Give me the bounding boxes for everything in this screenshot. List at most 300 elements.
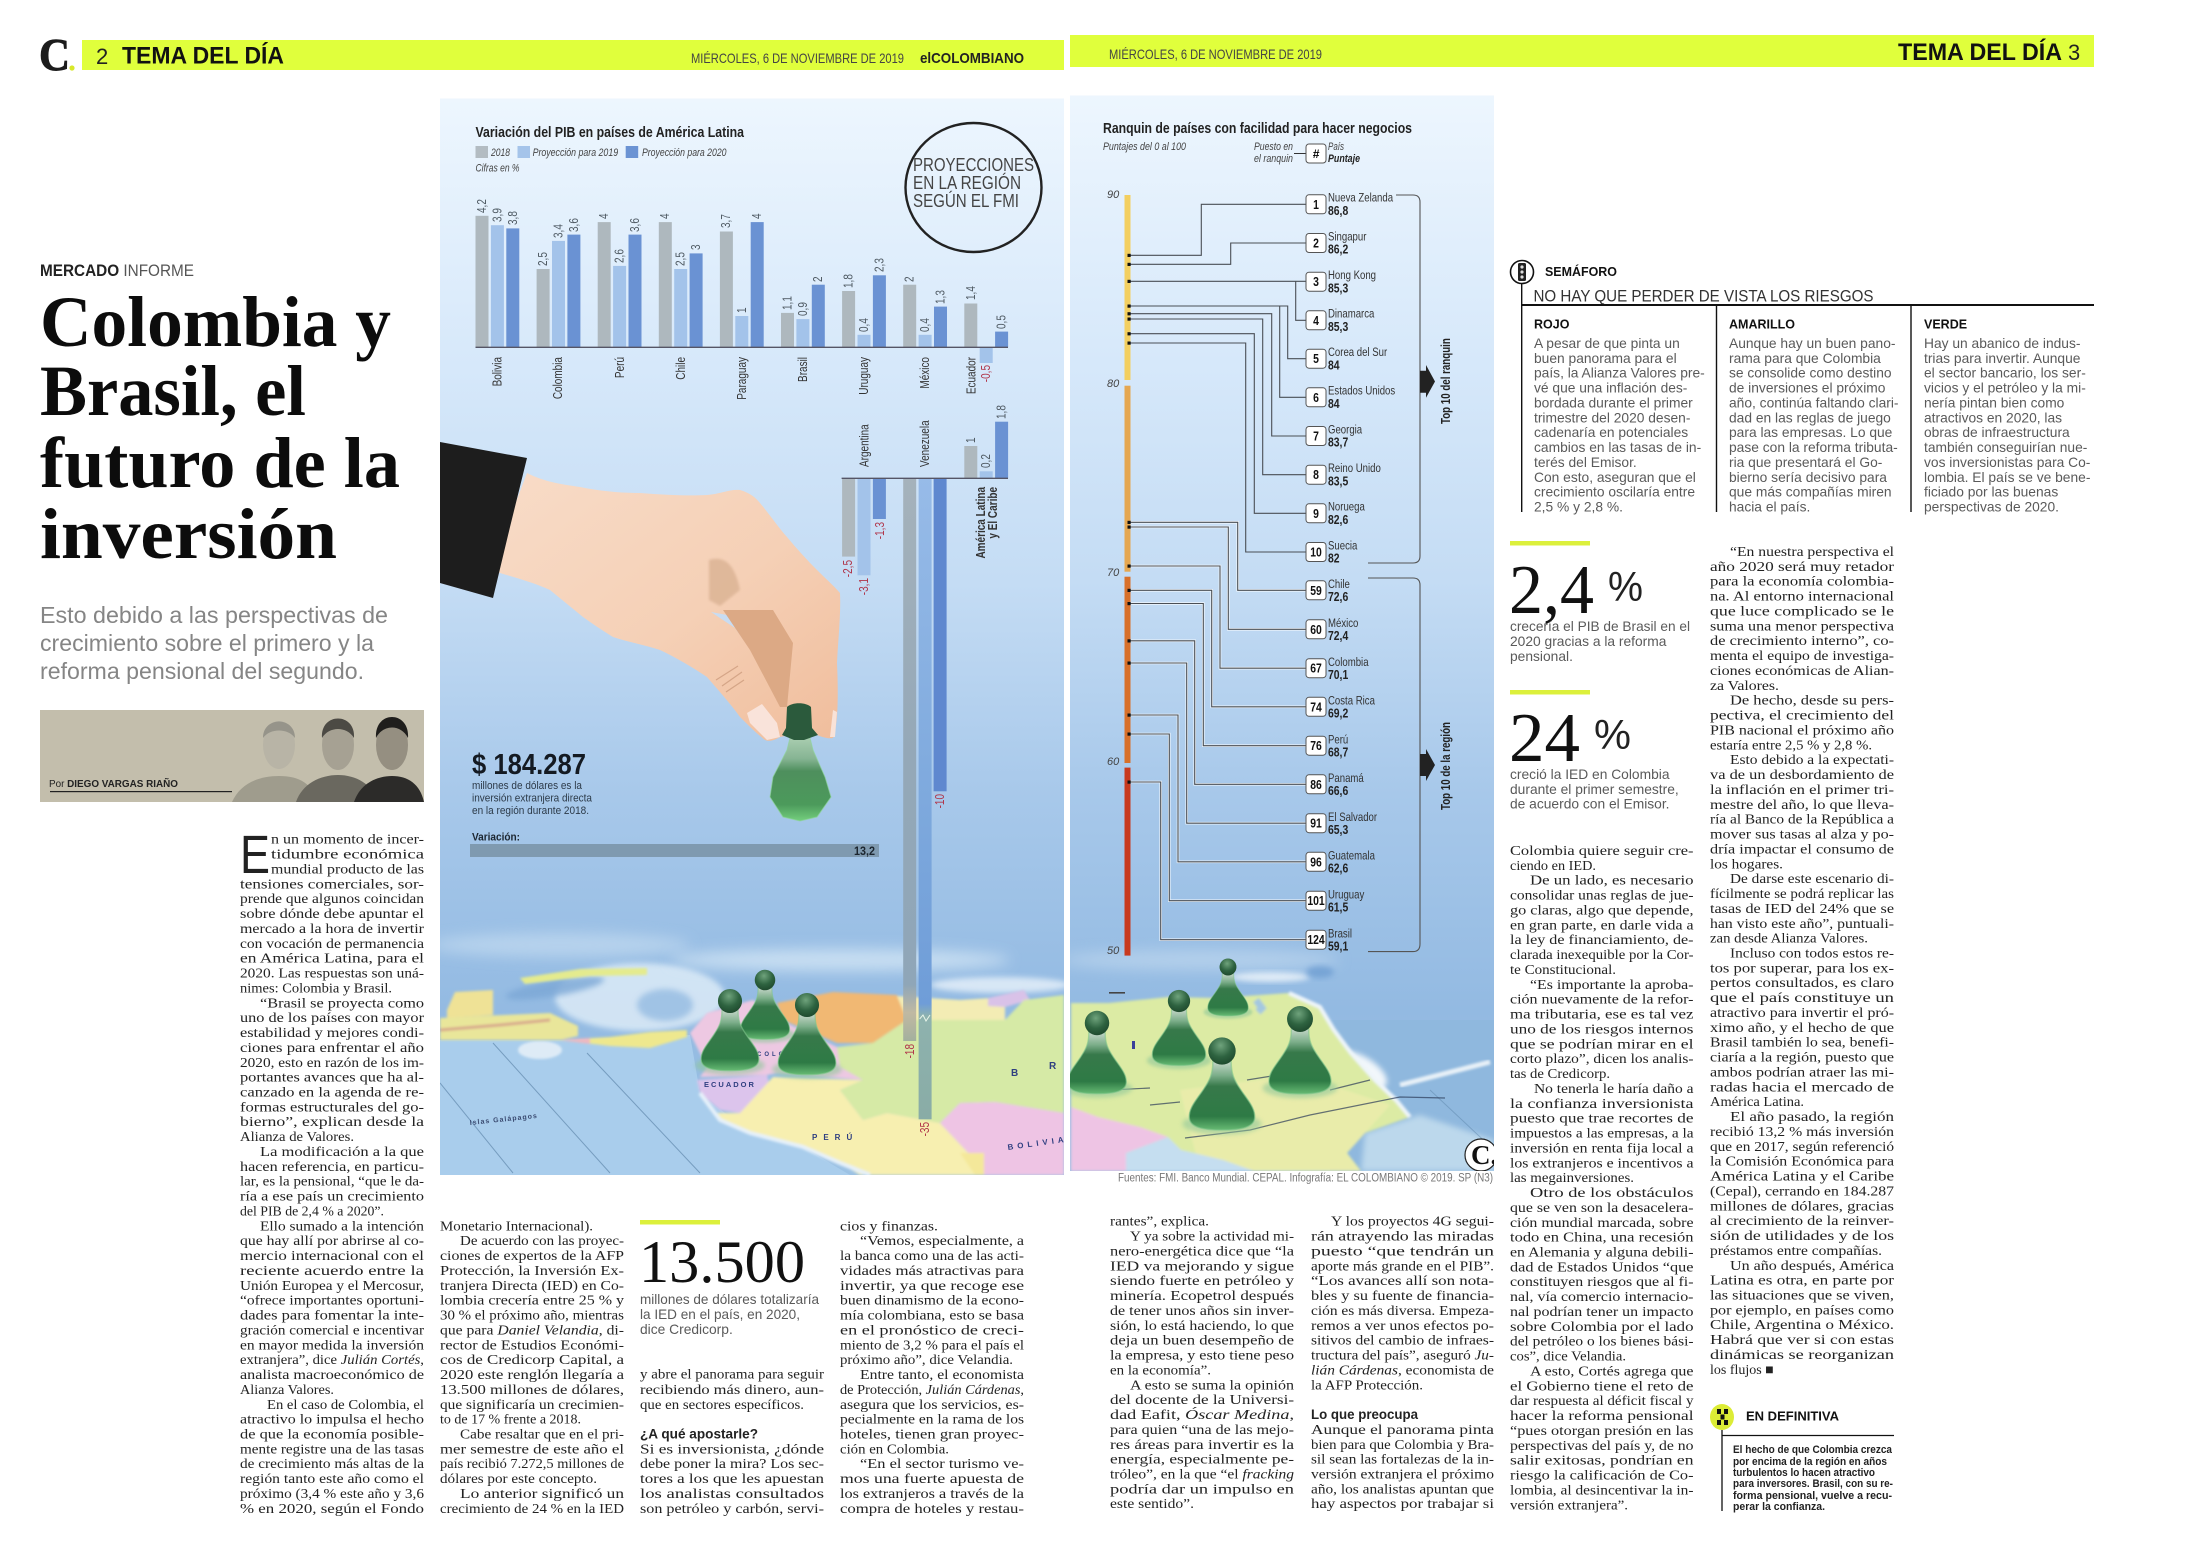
value labels: 1,1 — [782, 296, 795, 310]
article column 8: de crecimiento interno”, co- — [1710, 634, 1894, 649]
article column 6 — [1311, 1215, 1495, 1512]
right header bar — [1070, 35, 2094, 67]
article column 1: La modificación a la que — [260, 1145, 424, 1160]
panel text: forma pensional, vuelve a recu- — [1733, 1490, 1892, 1502]
connector halos — [1129, 522, 1306, 940]
panel: en definitiva — [1710, 1404, 1894, 1513]
callout circle: PROYECCIONES — [913, 155, 1034, 175]
country labels: Uruguay — [858, 357, 871, 395]
article column 8: fícilmente se podrá replicar las — [1710, 887, 1894, 902]
article column 8: las situaciones que se viven, — [1710, 1288, 1894, 1304]
subheading: Esto debido a las perspectivas de — [40, 602, 388, 628]
article column 2: tranjera Directa (IED) en Co- — [440, 1279, 624, 1294]
article column 7: Otro de los obstáculos — [1530, 1186, 1694, 1201]
value labels: 2 — [904, 276, 917, 282]
column: amarillo: año, continúa faltando clari- — [1729, 396, 1899, 410]
article column 8: pectiva, el crecimiento del — [1710, 709, 1894, 724]
country scores: 69,2 — [1328, 706, 1349, 721]
negative value labels — [842, 365, 993, 1136]
column: amarillo: dad en las reglas de juego — [1729, 410, 1891, 425]
article column 1: mercio internacional con el — [240, 1249, 424, 1264]
column: verde: el sector bancario, los ser- — [1924, 366, 2086, 381]
article column 4: “Vemos, especialmente, a — [860, 1234, 1025, 1249]
connector lines — [1129, 204, 1306, 940]
country labels: Paraguay — [736, 357, 749, 400]
article column 7: los extranjeros e incentivos a — [1510, 1156, 1694, 1171]
panel text: perar la confianza. — [1733, 1501, 1825, 1513]
value labels: 1 — [736, 307, 749, 313]
rank boxes — [1306, 195, 1326, 949]
article column 8: (Cepal), cerrando en 184.287 — [1710, 1184, 1894, 1199]
article column 1: prende que algunos coincidan — [240, 892, 424, 907]
map labels: Islas Galápagos — [469, 1113, 538, 1127]
article column 2: 13.500 millones de dólares, — [440, 1383, 624, 1398]
article column 1: sobre dónde debe apuntar el — [240, 907, 424, 922]
country labels: y El Caribe — [987, 487, 1000, 539]
article column 8: han visto este año”, puntuali- — [1710, 917, 1894, 932]
unit note: Cifras en % — [476, 163, 520, 175]
article column 7: la confianza inversionista — [1510, 1097, 1694, 1112]
country scores: 65,3 — [1328, 823, 1349, 837]
article column 5 — [1110, 1215, 1295, 1512]
article column 8: Esto debido a la expectati- — [1730, 753, 1894, 768]
article column 7: dad de Estados Unidos “que — [1510, 1260, 1694, 1275]
article column 7: “pues otorgan presión en las — [1510, 1424, 1694, 1439]
article column 7: cos”, dice Velandia. — [1510, 1350, 1626, 1365]
knuckle crease — [709, 559, 740, 606]
article column 1: región tanto este año como el — [240, 1472, 424, 1487]
article column 8: que el país constituye un — [1710, 991, 1894, 1006]
article column 8: ría al Banco de la República a — [1710, 813, 1895, 828]
headline: Colombia y — [40, 282, 391, 362]
article column 8: menta el equipo de investiga- — [1710, 649, 1894, 664]
article column 6: la AFP Protección. — [1311, 1378, 1423, 1393]
country names: Georgia — [1328, 423, 1363, 437]
article column 1: atractivo lo impulsa el hecho — [240, 1413, 424, 1428]
investment figure: $ 184.287 — [472, 749, 586, 781]
legend — [476, 146, 727, 159]
article column 8: Un año después, América — [1730, 1259, 1895, 1274]
article column 2: De acuerdo con las proyec- — [460, 1234, 624, 1249]
subheading: reforma pensional del segundo. — [40, 658, 364, 684]
column: amarillo: AMARILLO — [1729, 317, 1795, 331]
colored score scale: 80 — [1107, 378, 1120, 390]
article column 2: ciones de expertos de la AFP — [440, 1249, 624, 1264]
bracket: top 10 region — [1368, 578, 1453, 952]
article column 1: estabilidad y mejores condi- — [240, 1026, 424, 1041]
date: MIÉRCOLES, 6 DE NOVIEMBRE DE 2019 — [691, 50, 904, 66]
article column 8: Chile, Argentina o México. — [1710, 1318, 1894, 1333]
article column 7: ción nuevamente de la refor- — [1510, 993, 1694, 1008]
stat: 2,4 %: 2,4 — [1509, 552, 1594, 629]
article column 8: tos por superar, para los ex- — [1710, 961, 1894, 976]
investment figure: 13,2 — [854, 846, 875, 858]
stat: 2,4 % — [1509, 541, 1690, 664]
article column 2: 30 % el próximo año, mientras — [440, 1308, 624, 1324]
article column 7 — [1510, 844, 1694, 1513]
country names: Reino Unido — [1328, 462, 1381, 475]
key: # — [1313, 147, 1320, 161]
gray bars 2018 — [476, 216, 977, 1041]
article column 8: suma una menor perspectiva — [1710, 619, 1895, 634]
key: Puesto en — [1254, 141, 1293, 153]
column: amarillo: bierno sería decisivo para — [1729, 470, 1887, 485]
article column 7: No tenerla le haría daño a — [1534, 1082, 1694, 1097]
article column 5: energía, especialmente pe- — [1110, 1453, 1294, 1468]
stat: 13.500: 13.500 — [639, 1229, 805, 1295]
panel text: para inversores. Brasil, con su re- — [1733, 1478, 1893, 1490]
investment figure: inversión extranjera directa — [472, 793, 593, 805]
article column 7: el Gobierno tiene el reto de — [1510, 1379, 1694, 1394]
article column 6: ción es más diversa. Empeza- — [1311, 1304, 1494, 1319]
article column 4 — [840, 1219, 1025, 1517]
country names: Dinamarca — [1328, 308, 1375, 321]
article column 1: 2020. Las respuestas son uná- — [240, 966, 424, 982]
article column 4: la banca como una de las acti- — [840, 1249, 1024, 1264]
column: rojo: Con esto, aseguran que el — [1534, 470, 1696, 485]
value labels: 4 — [659, 213, 672, 219]
article column 5: Y ya sobre la actividad mi- — [1130, 1230, 1294, 1245]
country names: Singapur — [1328, 230, 1367, 244]
icon: traffic light — [1510, 260, 1534, 284]
value labels: 1 — [965, 437, 978, 443]
article column 1 — [240, 825, 425, 1517]
country scores: 83,7 — [1328, 436, 1349, 450]
article column 8: Incluso con todos estos re- — [1730, 946, 1894, 962]
article column 8: dinámicas se reorganizan — [1710, 1348, 1894, 1363]
article column 8: dría impactar el consumo de — [1710, 842, 1894, 857]
article column 7: lombia, al desincentivar la in- — [1510, 1483, 1694, 1498]
article column 8: los flujos ■ — [1710, 1363, 1774, 1378]
chart title: Variación del PIB en países de América Latina — [476, 124, 745, 141]
article column 1: n un momento de incer- — [271, 833, 424, 848]
article column 8: De darse este escenario di- — [1730, 872, 1894, 887]
subheading: crecimiento sobre el primero y la — [40, 630, 374, 656]
article column 3: recibiendo más dinero, aun- — [640, 1383, 824, 1398]
pawn in hand — [770, 703, 831, 821]
sky background — [1070, 96, 1494, 1171]
article column 8: los hogares. — [1710, 857, 1783, 872]
country scores: 86,2 — [1328, 243, 1349, 257]
article column 8: ciones económicas de Alian- — [1710, 664, 1894, 679]
country names: Estados Unidos — [1328, 385, 1396, 398]
article column 6: rán atrayendo las miradas — [1311, 1230, 1494, 1245]
article column 5: deja un buen desempeño de — [1110, 1334, 1294, 1349]
value labels: 2,5 — [675, 252, 688, 266]
value labels: 0,9 — [797, 302, 810, 316]
colored score scale — [1107, 189, 1130, 957]
country scores: 83,5 — [1328, 474, 1349, 489]
article column 5: del docente de la Universi- — [1110, 1393, 1294, 1408]
country names: Costa Rica — [1328, 695, 1376, 708]
article column 2: Cabe resaltar que en el pri- — [460, 1428, 624, 1442]
value labels: 3,7 — [720, 214, 733, 228]
article column 8: zan desde Alianza Valores. — [1710, 932, 1868, 947]
country labels: Chile — [675, 357, 688, 380]
article column 7: A esto, Cortés agrega que — [1530, 1364, 1694, 1380]
country names: Colombia — [1328, 656, 1369, 669]
article column 7: la ley de financiamiento, de- — [1510, 933, 1694, 948]
colored score scale: 60 — [1107, 756, 1120, 768]
stat: 24 %: % — [1594, 711, 1631, 758]
article column 1: “Brasil se proyecta como — [260, 996, 424, 1011]
article column 8: que en 2017, según referenció — [1710, 1140, 1894, 1155]
article column 7: nal, vía comercio internacio- — [1510, 1290, 1694, 1305]
article column 3: y abre el panorama para seguir — [640, 1368, 824, 1383]
article column 3: tores a los que les apuestan — [640, 1472, 824, 1487]
article column 7: impuestos a las empresas, a la — [1510, 1126, 1694, 1142]
article column 1: en mayor medida la inversión — [240, 1338, 424, 1353]
article column 2: mer semestre de este año el — [440, 1442, 624, 1457]
article column 5: rantes”, explica. — [1110, 1215, 1209, 1230]
article column 7: versión extranjera”. — [1510, 1498, 1628, 1513]
article column 2: que para Daniel Velandia , di- — [440, 1323, 624, 1338]
article column 2: dólares por este concepto. — [440, 1472, 597, 1487]
article column 7: que se ven son la desacelera- — [1510, 1201, 1694, 1216]
article column 2: lombia crecería entre 25 % y — [440, 1294, 624, 1309]
article column 2: Lo anterior significó un — [460, 1487, 624, 1502]
country labels: México — [919, 357, 932, 389]
column: amarillo — [1729, 317, 1899, 515]
article column 7: consolidar unas reglas de jue- — [1510, 889, 1694, 904]
column: rojo: crecimiento oscilaría entre — [1534, 485, 1695, 500]
article column 8: pertos consultados, es claro — [1710, 976, 1894, 991]
column: rojo — [1534, 317, 1705, 515]
callout circle: SEGÚN EL FMI — [913, 190, 1019, 211]
country scores: 72,6 — [1328, 590, 1349, 604]
article column 7: que se podrían mirar en el — [1510, 1037, 1694, 1052]
article column 3: debe poner la mira? Los sec- — [640, 1457, 824, 1472]
article column 8: na. Al entorno internacional — [1710, 590, 1894, 605]
axes — [476, 347, 1008, 478]
panel: left infographic — [430, 98, 1070, 1175]
rank numbers: 6 — [1313, 391, 1319, 405]
article column 7: ciendo en IED. — [1510, 859, 1596, 874]
article column 1: nimes: Colombia y Brasil. — [240, 981, 392, 996]
article column 7: uno de los riesgos internos — [1510, 1022, 1694, 1037]
article column 4: vidades más atractivas para — [840, 1264, 1025, 1279]
stat: 13.500: dice Credicorp. — [640, 1322, 733, 1337]
rank numbers: 8 — [1313, 468, 1319, 483]
article column 1: mercado a la hora de invertir — [240, 922, 424, 937]
article column 6: aporte más grande en el PIB”. — [1311, 1259, 1494, 1274]
article column 6: puesto “que tendrán un — [1311, 1244, 1494, 1259]
article column 7: salir exitosas, pondrían en — [1510, 1454, 1694, 1469]
value labels: 0,5 — [996, 315, 1009, 329]
article column 2: crecimiento de 24 % en la IED — [440, 1502, 624, 1517]
panel text — [1733, 1444, 1893, 1513]
article column 2: 2020 este renglón llegaría a — [440, 1368, 625, 1383]
country labels: Ecuador — [966, 357, 979, 394]
rank numbers: 91 — [1310, 817, 1322, 831]
article column 1: hacen referencia, en particu- — [240, 1160, 424, 1175]
investment figure: en la región durante 2018. — [472, 805, 589, 817]
country names: Brasil — [1328, 927, 1352, 941]
article column 2 — [440, 1219, 625, 1517]
article column 8: Latina es otra, en parte por — [1710, 1274, 1894, 1289]
article column 1: gración comercial e incentivar — [240, 1323, 424, 1338]
article column 1: 2020, esto en razón de los im- — [240, 1056, 424, 1071]
article column 1: ría a ese país un crecimiento — [240, 1190, 424, 1205]
article column 8: atractivo para invertir el pró- — [1710, 1006, 1894, 1021]
subtitle: Puntajes del 0 al 100 — [1103, 141, 1187, 153]
article column 8: mestre del año, lo que lleva- — [1710, 798, 1894, 813]
article column 1: Unión Europea y el Mercosur, — [240, 1279, 424, 1294]
article column 7: go claras, algo que depende, — [1510, 904, 1694, 918]
column: amarillo: hacia el país. — [1729, 500, 1810, 515]
article column 5: tróleo”, en la que “el fracking — [1110, 1468, 1294, 1482]
ocean and clouds — [1060, 950, 1500, 1171]
article column 7: del petróleo o los bienes bási- — [1510, 1335, 1694, 1350]
rank numbers: 74 — [1310, 700, 1322, 715]
gap between fingers — [711, 612, 740, 635]
article column 4: miento de 3,2 % para el país el — [840, 1338, 1024, 1353]
article column 7: De un lado, es necesario — [1530, 874, 1694, 889]
value labels: 3,6 — [629, 218, 642, 232]
article column 1: % en 2020, según el Fondo — [240, 1502, 424, 1517]
country names: Panamá — [1328, 772, 1365, 785]
article column 1: tensiones comerciales, sor- — [240, 877, 424, 892]
panel: semáforo — [1510, 260, 2094, 515]
kicker: MERCADO INFORME — [40, 262, 194, 280]
value labels: 2,3 — [873, 258, 887, 272]
article column 1: Alianza Valores. — [240, 1383, 334, 1398]
countries — [440, 968, 1064, 1175]
article column 3: Si es inversionista, ¿dónde — [640, 1442, 824, 1457]
rank numbers — [1307, 198, 1325, 948]
value labels: 3,9 — [491, 208, 505, 222]
rank numbers: 7 — [1313, 429, 1319, 444]
article column 6: tructura del país”, aseguró Ju- — [1311, 1348, 1494, 1364]
value labels: 1,3 — [935, 290, 948, 304]
map labels: ECUADOR — [704, 1080, 756, 1089]
headline: inversión — [40, 494, 337, 574]
bracket: top 10 region: Top 10 de la región — [1440, 722, 1453, 810]
column: verde: vicios y el petróleo y la mi- — [1924, 381, 2086, 396]
article column 6: sitivos del cambio de infraes- — [1311, 1334, 1494, 1349]
article column 8: sión de utilidades y de los — [1710, 1229, 1894, 1244]
article column 7: todo en China, una recesión — [1510, 1231, 1694, 1246]
stat: 24 % — [1509, 690, 1679, 812]
value labels: 4 — [598, 213, 611, 219]
legend: Proyección para 2019 — [533, 147, 618, 159]
article column 7: tas de Credicorp. — [1510, 1067, 1610, 1082]
byline box — [40, 710, 424, 802]
column: amarillo: ria que presentará el Go- — [1729, 455, 1882, 470]
article column 7: ma tributaria, ese es tal vez — [1510, 1008, 1694, 1023]
article column 8: que luce complicado se le — [1710, 604, 1894, 620]
country names: Nueva Zelanda — [1328, 192, 1394, 205]
article column 6: bles y su fuente de financia- — [1311, 1289, 1494, 1304]
article column 7: nal podrían tener un impacto — [1510, 1305, 1694, 1320]
country scores: 84 — [1328, 358, 1340, 373]
country labels: Bolivia — [492, 356, 505, 386]
column: verde: trias para invertir. Aunque — [1924, 351, 2081, 366]
rank numbers: 1 — [1313, 198, 1319, 212]
country scores: 62,6 — [1328, 861, 1349, 876]
column: verde: también conseguirían nue- — [1924, 440, 2087, 455]
article column 2: cos de Credicorp Capital, a — [440, 1353, 625, 1368]
country scores: 85,3 — [1328, 320, 1349, 334]
callout circle: EN LA REGIÓN — [913, 172, 1021, 193]
article column 5: dad Eafit, Óscar Medina , — [1110, 1406, 1294, 1423]
stat: 24 %: durante el primer semestre, — [1510, 782, 1679, 797]
country scores: 86,8 — [1328, 204, 1349, 218]
article column 1: de crecimiento más altas de la — [240, 1457, 425, 1472]
rank numbers: 10 — [1310, 545, 1322, 560]
bracket: top 10 ranking: Top 10 del ranquin — [1440, 338, 1453, 424]
article column 4: cios y finanzas. — [840, 1219, 938, 1234]
article column 4: los extranjeros a través de la — [840, 1487, 1025, 1502]
break mark — [920, 1015, 930, 1021]
column: rojo: terés del Emisor. — [1534, 455, 1637, 470]
callout circle — [906, 123, 1042, 252]
article column 8: ambos podrían atraer las mi- — [1710, 1066, 1894, 1080]
column: rojo: bordada durante el primer — [1534, 396, 1693, 410]
article column 8: mover sus tasas al alza y po- — [1710, 828, 1894, 842]
column: verde: vos inversionistas para Co- — [1924, 455, 2090, 470]
legend: Proyección para 2020 — [642, 147, 727, 159]
column: amarillo: para las empresas. Lo que — [1729, 425, 1893, 440]
negative value labels: -18 — [904, 1044, 917, 1058]
article column 7: sobre Colombia por el lado — [1510, 1320, 1694, 1335]
country scores: 59,1 — [1328, 939, 1349, 954]
article column 8: al crecimiento de la reinver- — [1710, 1214, 1894, 1229]
article column 3: son petróleo y carbón, servi- — [640, 1502, 824, 1517]
article column 1: formas estructurales del go- — [240, 1100, 424, 1115]
article column 7: puesto que trae recortes de — [1510, 1112, 1694, 1127]
article column 8: por ejemplo, en países como — [1710, 1303, 1894, 1318]
article column 6: Y los proyectos 4G segui- — [1331, 1215, 1494, 1230]
source caption: Fuentes: FMI. Banco Mundial. CEPAL. Infografía: EL COLOMBIANO © 2019. SP (N3) — [1118, 1172, 1493, 1184]
column: rojo: vé que una inflación des- — [1534, 381, 1687, 396]
article column 2: rector de Estudios Económi- — [440, 1338, 624, 1353]
article column 5: para quien “una de las mejo- — [1110, 1423, 1294, 1438]
rivers and roads — [1110, 1075, 1445, 1138]
column: rojo: 2,5 % y 2,8 %. — [1534, 500, 1623, 515]
negative value labels: -0,5 — [980, 365, 993, 382]
map of northern South America — [430, 933, 1070, 1175]
investment figure — [470, 749, 879, 858]
article column 4: asegura que los servicios, es- — [840, 1398, 1024, 1413]
panel label: EN DEFINITIVA — [1746, 1409, 1840, 1424]
map labels: B — [1011, 1068, 1018, 1079]
country labels: Colombia — [552, 356, 565, 399]
column: verde: nería pintan bien como — [1924, 396, 2065, 410]
article column 2: Monetario Internacional). — [440, 1219, 593, 1234]
article column 8: la inflación en el primer tri- — [1710, 783, 1894, 798]
pawns on map — [695, 970, 842, 1079]
article column 1: analista macroeconómico de — [240, 1368, 424, 1383]
article column 8 — [1710, 545, 1895, 1378]
article column 1: con vocación de permanencia — [240, 937, 425, 952]
stat: 24 %: creció la IED en Colombia — [1510, 767, 1670, 782]
article column 4: Entre tanto, el economista — [860, 1368, 1025, 1383]
country labels: América Latina — [975, 486, 988, 559]
article column 5: este sentido”. — [1110, 1497, 1194, 1512]
country labels: Venezuela — [919, 420, 932, 467]
value labels: 1,8 — [843, 274, 856, 288]
rank numbers: 4 — [1313, 314, 1319, 328]
map labels: PERÚ — [812, 1133, 858, 1142]
article column 1: reciente acuerdo entre la — [240, 1264, 425, 1279]
article column 5: minería. Ecopetrol después — [1110, 1289, 1294, 1304]
stat: 13.500: la IED en el país, en 2020, — [640, 1307, 800, 1322]
key — [1254, 141, 1360, 165]
map labels: BOLIVIA — [1007, 1135, 1068, 1152]
column: rojo: ROJO — [1534, 317, 1570, 331]
subheading: Lo que preocupa — [1311, 1406, 1418, 1422]
